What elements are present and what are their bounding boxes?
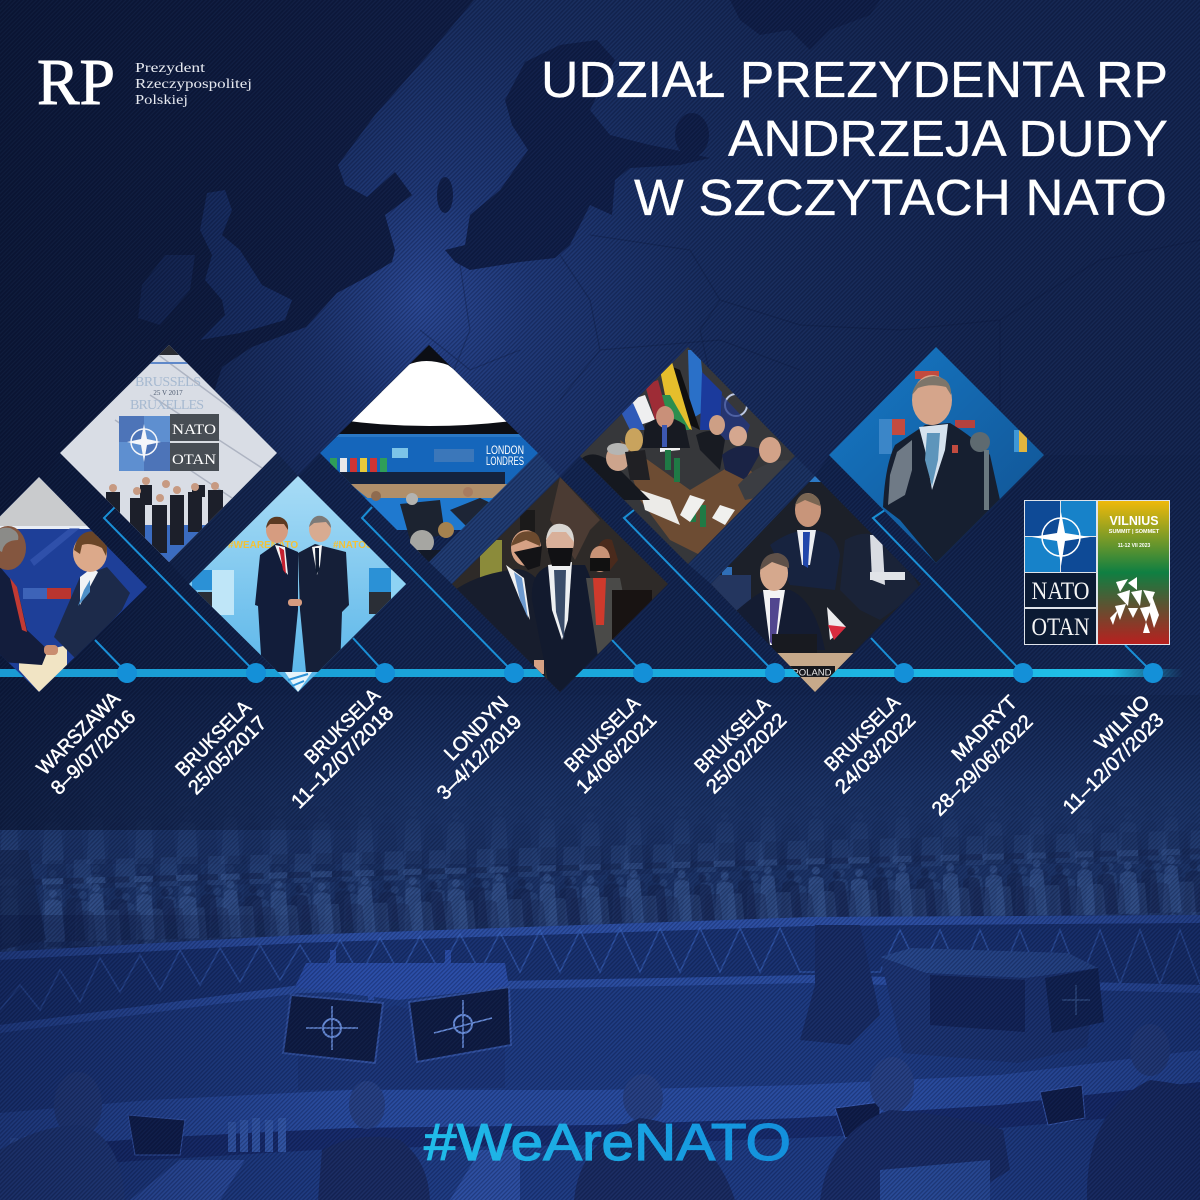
geometric Vytis horse and rider xyxy=(1110,577,1159,633)
label: Wilno: WILNO xyxy=(1091,691,1155,755)
label: Wilno: 11–12/07/2023 xyxy=(1059,709,1169,819)
left vignette xyxy=(0,0,420,830)
title: W SZCZYTACH NATO xyxy=(634,169,1167,226)
title: ANDRZEJA DUDY xyxy=(728,110,1168,167)
Great Britain xyxy=(200,190,292,340)
stage lettering xyxy=(130,377,204,409)
photo: Brussels 2018 handshake with Stoltenberg: #NATOSUMMIT xyxy=(333,540,405,551)
label: Madryt: MADRYT xyxy=(948,692,1022,766)
Lake Ladoga and White Sea xyxy=(437,0,880,213)
flags xyxy=(688,350,702,416)
label: Bruksela 2021: 14/06/2021 xyxy=(572,709,661,798)
label: Bruksela 2017: BRUKSELA xyxy=(172,696,256,781)
dark lattice behind the diamonds xyxy=(0,345,1200,785)
NATO sign: NATO xyxy=(172,422,216,438)
NATO sign xyxy=(119,414,219,471)
NATO Vilnius summit logo: VILNIUS xyxy=(1110,514,1158,528)
label: Bruksela 2018: 11–12/07/2018 xyxy=(287,702,398,813)
photo: Warsaw 2016 handshake xyxy=(0,477,150,692)
photo: Madrid 2022 portrait xyxy=(829,347,1049,567)
photo: Brussels March 2022 with POLAND nameplate xyxy=(711,476,931,692)
label: Bruksela 2021 xyxy=(561,692,661,798)
label: Bruksela March 2022: 24/03/2022 xyxy=(831,709,920,798)
label: Bruksela February 2022: BRUKSELA xyxy=(691,693,775,778)
background photo: audience rows xyxy=(0,825,1200,952)
background: lower blue band xyxy=(0,500,1200,830)
label: Warszawa: WARSZAWA xyxy=(33,687,125,780)
conference table xyxy=(0,1050,1200,1170)
label: Londyn: 3–4/12/2019 xyxy=(433,711,526,804)
stage lettering: BRUSSELS xyxy=(135,375,201,390)
logo wordmark xyxy=(135,61,252,108)
patterned wall with chevrons xyxy=(0,923,1200,1025)
podium right xyxy=(880,948,1104,1063)
label: Bruksela March 2022 xyxy=(821,691,920,798)
hashtag: #WeAreNATO xyxy=(424,1114,791,1172)
photo: London 2019 summit room: LONDON xyxy=(486,443,524,457)
Atlantic and North Sea xyxy=(0,0,474,700)
label: Bruksela 2017: 25/05/2017 xyxy=(184,712,271,799)
label: Bruksela February 2022: 25/02/2022 xyxy=(702,709,791,798)
timeline markers xyxy=(117,663,1163,683)
NATO Vilnius summit logo: 11-12 VII 2023 xyxy=(1118,543,1150,549)
title: UDZIAŁ PREZYDENTA RP xyxy=(541,51,1168,108)
label: Londyn: LONDYN xyxy=(440,692,513,765)
label: Madryt: 28–29/06/2022 xyxy=(928,711,1038,821)
NATO Vilnius summit logo: OTAN xyxy=(1032,614,1090,641)
timeline axis xyxy=(0,669,1195,677)
foreground delegates xyxy=(0,1024,1200,1200)
photo: Brussels 2018 handshake with Stoltenberg xyxy=(189,476,409,692)
photo: London 2019 summit room xyxy=(320,345,540,570)
logo wordmark: Polskiej xyxy=(135,93,188,108)
logo: Prezydent Rzeczypospolitej Polskiej xyxy=(37,46,252,119)
photo: Brussels March 2022 with POLAND nameplate: POLAND xyxy=(792,668,832,678)
photo: Brussels 2018 handshake with Stoltenberg: #WEARENATO xyxy=(228,540,298,551)
label: Bruksela 2018: BRUKSELA xyxy=(301,684,385,769)
stage lettering: BRUXELLES xyxy=(130,398,204,413)
connector lines from timeline to photos xyxy=(95,507,1153,673)
Ireland xyxy=(138,255,195,325)
Baltic Sea xyxy=(445,40,710,270)
logo wordmark: Rzeczypospolitej xyxy=(135,77,252,92)
photo: Brussels 2021 with Biden xyxy=(452,477,672,692)
seated delegates xyxy=(642,418,690,448)
dark person crouching with flag xyxy=(800,925,880,1045)
title xyxy=(541,51,1168,226)
podium left xyxy=(283,950,511,1090)
NATO compass star xyxy=(1032,512,1090,566)
label: Warszawa: 8–9/07/2016 xyxy=(47,706,140,799)
photo: London 2019 summit room: LONDRES xyxy=(486,454,524,468)
side logos xyxy=(192,570,212,590)
photo: Brussels February 2022 meeting xyxy=(580,347,800,567)
stage lettering: 25 V 2017 xyxy=(153,389,183,397)
logo monogram RP: RP xyxy=(37,46,115,119)
label: Bruksela 2021: BRUKSELA xyxy=(561,692,645,777)
NATO Vilnius summit logo: SUMMIT | SOMMET xyxy=(1109,529,1160,535)
NATO Vilnius summit logo: NATO xyxy=(1032,578,1090,605)
NATO sign: OTAN xyxy=(172,452,216,468)
photo: Brussels 2017 NATO stage xyxy=(60,345,280,565)
label: Bruksela March 2022: BRUKSELA xyxy=(821,691,905,776)
NATO Vilnius summit logo xyxy=(1024,500,1170,645)
logo wordmark: Prezydent xyxy=(135,61,205,76)
background photo: summit hall xyxy=(0,915,1200,1200)
